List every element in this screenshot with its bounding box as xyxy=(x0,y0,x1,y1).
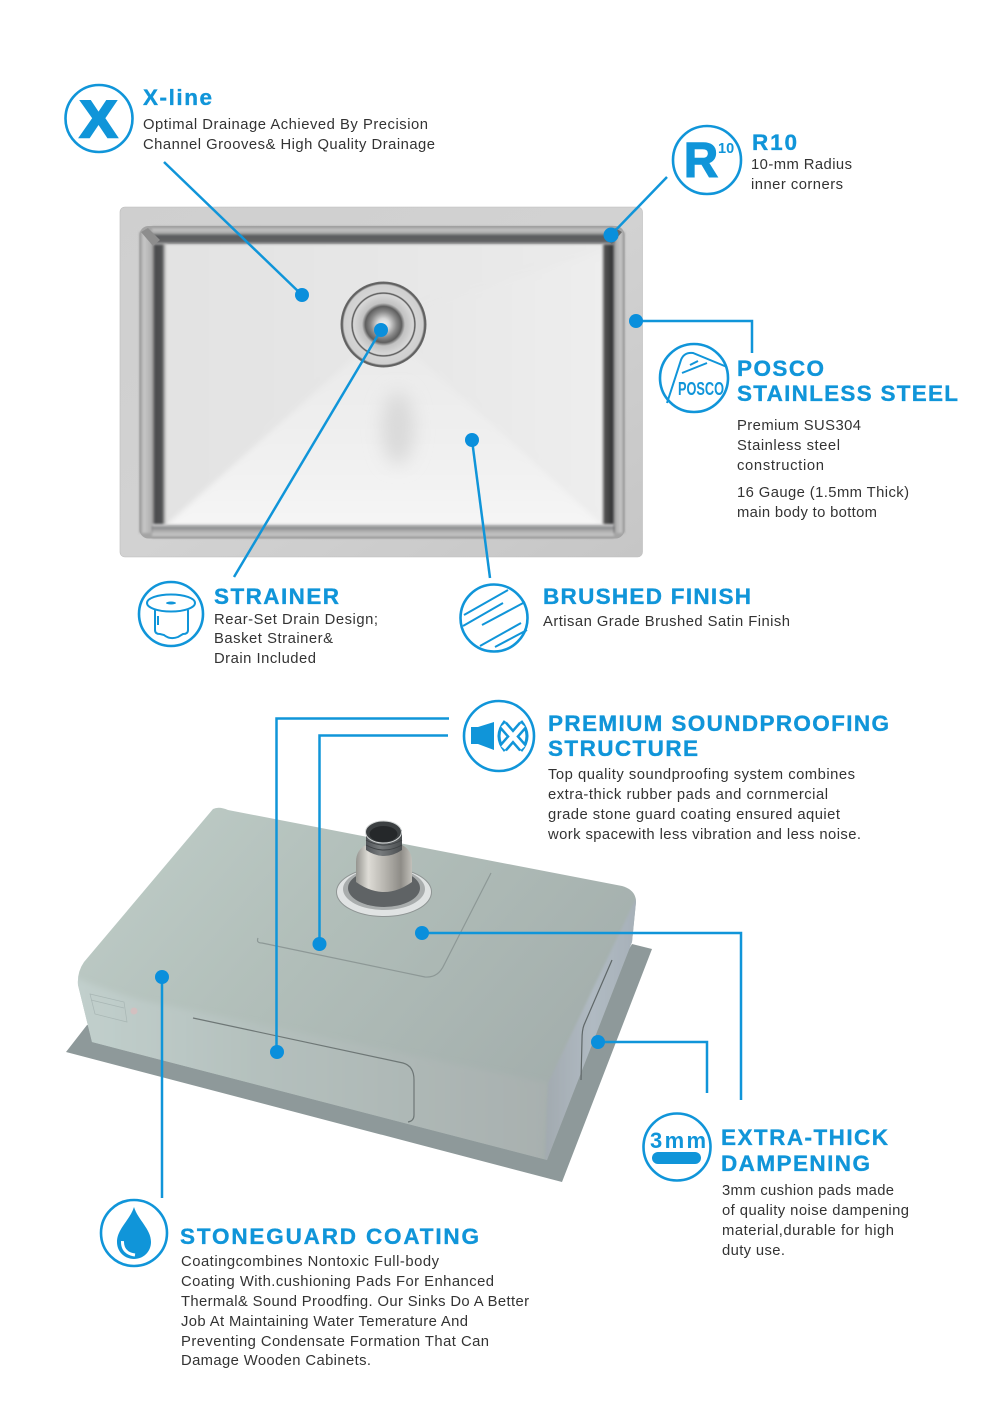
heading: extra-thick dampening: EXTRA-THICK xyxy=(721,1125,889,1150)
text: X-line description: Optimal Drainage Achieved By Precision xyxy=(143,117,428,133)
text: dampening description: of quality noise dampening xyxy=(722,1203,909,1219)
heading: extra-thick dampening xyxy=(721,1125,889,1176)
heading: POSCO stainless steel: STAINLESS STEEL xyxy=(737,381,958,406)
heading: soundproofing: STRUCTURE xyxy=(548,736,698,761)
text: POSCO description: Stainless steel xyxy=(737,438,840,454)
callout line: dampening top xyxy=(415,926,741,1100)
callout line: brushed finish xyxy=(465,433,490,578)
callout line: soundproofing outer xyxy=(270,718,449,1059)
heading: X-line: X-line xyxy=(143,85,212,110)
text: POSCO description xyxy=(737,418,909,521)
text: R10 description: 10-mm Radius xyxy=(751,157,852,173)
text: soundproofing description: extra-thick rubber pads and cornmercial xyxy=(548,787,828,803)
icon: 3mm pad xyxy=(644,1114,710,1180)
callout line: soundproofing inner xyxy=(312,736,448,951)
icon: muted speaker xyxy=(464,701,534,771)
heading: R10: R10 xyxy=(752,130,797,155)
text: strainer description xyxy=(214,612,378,667)
icon: X-line badge xyxy=(66,85,132,152)
heading: extra-thick dampening: DAMPENING xyxy=(721,1151,870,1176)
panel: extra-thick dampening xyxy=(644,1114,909,1259)
text: strainer description: Basket Strainer& xyxy=(214,631,333,647)
text: dampening description: duty use. xyxy=(722,1243,785,1259)
icon: R10 badge: 10 xyxy=(718,141,734,157)
text: stoneguard description xyxy=(181,1254,529,1369)
text: stoneguard description: Preventing Condensate Formation That Can xyxy=(181,1334,489,1350)
icon: brushed lines xyxy=(460,584,528,652)
heading: POSCO stainless steel xyxy=(737,356,958,406)
text: soundproofing description: Top quality soundproofing system combines xyxy=(548,767,855,783)
heading: POSCO stainless steel: POSCO xyxy=(737,356,824,381)
panel: brushed finish xyxy=(460,584,790,652)
panel: strainer xyxy=(139,582,378,667)
callout line: dampening side xyxy=(591,1035,707,1093)
heading: stoneguard coating: STONEGUARD COATING xyxy=(180,1224,479,1249)
panel: soundproofing xyxy=(464,701,889,843)
text: stoneguard description: Coatingcombines Nontoxic Full-body xyxy=(181,1254,440,1270)
sink underside view photo xyxy=(66,808,652,1182)
heading: strainer: STRAINER xyxy=(214,584,339,609)
heading: brushed finish: BRUSHED FINISH xyxy=(543,584,751,609)
text: POSCO description: main body to bottom xyxy=(737,505,877,521)
text: brushed finish description: Artisan Grade Brushed Satin Finish xyxy=(543,614,790,630)
panel: R10 xyxy=(673,126,852,194)
icon: POSCO badge xyxy=(660,344,728,412)
text: X-line description xyxy=(143,117,435,153)
text: stoneguard description: Coating With.cushioning Pads For Enhanced xyxy=(181,1274,494,1290)
text: soundproofing description: work spacewith less vibration and less noise. xyxy=(547,827,861,843)
icon: R10 badge xyxy=(673,126,741,194)
text: R10 description xyxy=(751,157,852,193)
text: strainer description: Drain Included xyxy=(214,651,316,667)
icon: water drop xyxy=(101,1200,167,1266)
text: stoneguard description: Damage Wooden Cabinets. xyxy=(181,1353,371,1369)
text: soundproofing description: grade stone guard coating ensured aquiet xyxy=(548,807,840,823)
heading: soundproofing: PREMIUM SOUNDPROOFING xyxy=(548,711,889,736)
callout line: strainer xyxy=(234,323,388,577)
callout line: R10 xyxy=(604,177,667,242)
text: soundproofing description xyxy=(547,767,861,843)
text: stoneguard description: Job At Maintaining Water Temerature And xyxy=(181,1314,468,1330)
text: strainer description: Rear-Set Drain Design; xyxy=(214,612,378,628)
icon: strainer basket xyxy=(139,582,203,646)
icon: R10 badge: R xyxy=(684,134,718,188)
text: dampening description: material,durable for high xyxy=(722,1223,894,1239)
sink top view photo xyxy=(120,207,642,557)
text: X-line description: Channel Grooves& High Quality Drainage xyxy=(143,137,435,153)
callout line: stoneguard xyxy=(155,970,169,1198)
callout line: POSCO xyxy=(629,314,752,353)
panel: X-line xyxy=(66,85,435,153)
text: R10 description: inner corners xyxy=(751,177,843,193)
panel: POSCO stainless steel xyxy=(660,344,958,521)
text: POSCO description: 16 Gauge (1.5mm Thick) xyxy=(737,485,909,501)
text: POSCO description: Premium SUS304 xyxy=(737,418,861,434)
text: dampening description: 3mm cushion pads made xyxy=(722,1183,894,1199)
callout line: X-line xyxy=(164,162,309,302)
panel: stoneguard coating xyxy=(101,1200,529,1369)
icon: 3mm pad: 3mm xyxy=(650,1128,706,1153)
text: stoneguard description: Thermal& Sound Proodfing. Our Sinks Do A Better xyxy=(181,1294,529,1310)
icon: X-line badge: X xyxy=(80,91,117,149)
text: dampening description xyxy=(722,1183,909,1259)
text: POSCO description: construction xyxy=(737,458,824,474)
heading: soundproofing xyxy=(548,711,889,761)
icon: POSCO badge: POSCO xyxy=(678,379,724,399)
